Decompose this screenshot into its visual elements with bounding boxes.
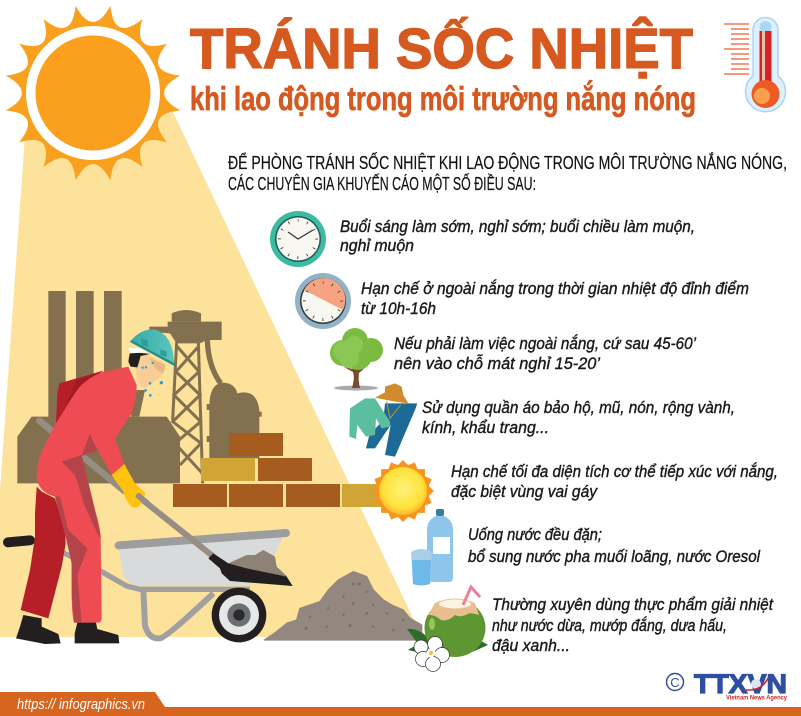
shovel: [139, 497, 213, 556]
item 2 text: [361, 279, 749, 318]
sand pile: [264, 572, 422, 640]
item 7 text: đậu xanh...: [492, 637, 570, 655]
intro text: CÁC CHUYÊN GIA KHUYẾN CÁO MỘT SỐ ĐIỀU SAU:: [228, 173, 536, 194]
icon: protective clothes: [349, 383, 417, 457]
icon: water bottle and glass: [411, 509, 453, 586]
logo: TTXVN: Vietnam News Agency: [726, 694, 787, 702]
item 4 text: [422, 399, 735, 437]
icon: thermometer: [724, 17, 786, 112]
icon: clock 10h-16h: [295, 273, 351, 329]
glove: [112, 464, 146, 508]
footer bar: https:// infographics.vn: [17, 696, 145, 713]
suit shade lower: [55, 497, 87, 623]
head: [135, 353, 165, 388]
item 2 text: từ 10h-16h: [361, 300, 436, 318]
logo: TTXVN: TTXVN: [694, 669, 787, 699]
item 4 text: Sử dụng quần áo bảo hộ, mũ, nón, rộng vành,: [422, 399, 735, 417]
item 1 text: [340, 218, 695, 255]
item 5 text: đặc biệt vùng vai gáy: [451, 483, 599, 501]
item 3 text: Nếu phải làm việc ngoài nắng, cứ sau 45-60’: [394, 334, 696, 353]
suit shade upper: [62, 455, 101, 537]
factory silhouette: [17, 291, 262, 483]
item 6 text: bổ sung nước pha muối loãng, nước Oresol: [468, 548, 761, 566]
sunlight beam: [0, 110, 422, 637]
logo: TTXVN: C: [670, 675, 680, 690]
wheelbarrow: [8, 533, 287, 642]
red suit: [37, 367, 137, 623]
worker: [16, 329, 293, 644]
icon: clock morning: [270, 211, 326, 267]
item 4 text: kính, khẩu trang...: [422, 419, 549, 437]
sweat drops: [141, 362, 163, 397]
item 7 text: Thường xuyên dùng thực phẩm giải nhiệt: [492, 596, 774, 614]
item 5 text: Hạn chế tối đa diện tích cơ thể tiếp xúc với nắng,: [451, 462, 778, 481]
bricks: [173, 433, 396, 507]
item 5 text: [451, 462, 778, 501]
shovel handle upper: [39, 421, 124, 491]
item 6 text: [468, 526, 761, 566]
rear leg: [21, 487, 66, 618]
intro text: [228, 152, 787, 194]
item 1 text: Buổi sáng làm sớm, nghỉ sớm; buổi chiều làm muộn,: [340, 218, 695, 236]
icon: coconut: [407, 587, 488, 672]
footer bar: [0, 692, 801, 716]
icon: small sun: [372, 460, 434, 522]
item 2 text: Hạn chế ở ngoài nắng trong thời gian nhiệt độ đỉnh điểm: [361, 279, 749, 298]
backpack: [56, 371, 103, 423]
item 7 text: [492, 596, 774, 655]
item 6 text: Uống nước đều đặn;: [468, 526, 602, 544]
icon: tree: [330, 328, 383, 390]
boots: [16, 615, 61, 644]
helmet: [131, 329, 174, 364]
item 1 text: nghỉ muộn: [340, 237, 414, 255]
item 3 text: nên vào chỗ mát nghỉ 15-20’: [394, 354, 600, 373]
item 7 text: như nước dừa, mướp đắng, dưa hấu,: [492, 616, 727, 635]
logo: TTXVN: [666, 669, 787, 702]
sun: [6, 6, 180, 180]
item 3 text: [394, 334, 696, 373]
title: TRÁNH SỐC NHIỆT: [190, 16, 693, 81]
